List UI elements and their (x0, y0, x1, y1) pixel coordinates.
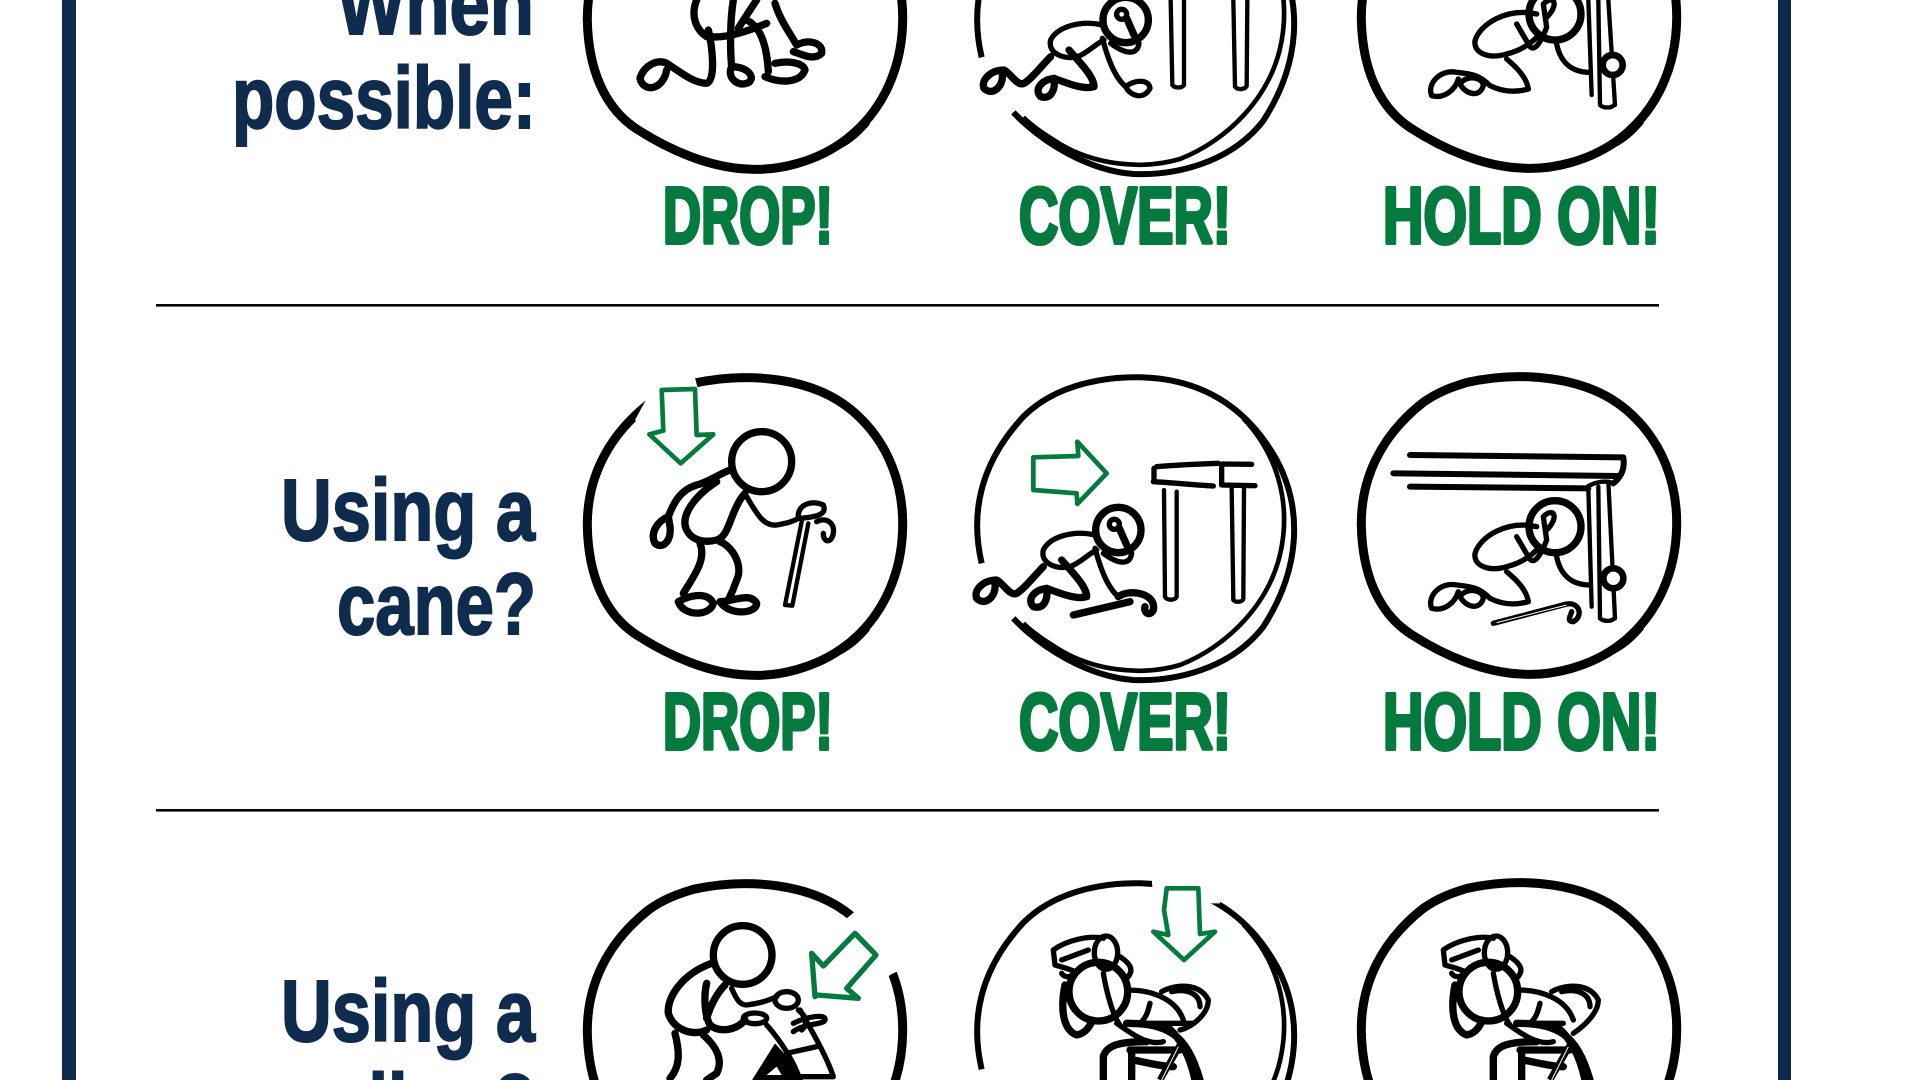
panel: cover with walker (977, 877, 1294, 1080)
panel: cover (977, 0, 1294, 260)
label: drop: DROP! (663, 677, 833, 766)
label: cover: COVER! (1019, 677, 1231, 766)
illustration: person in walker seat holding on (1361, 883, 1677, 1080)
illustration: person holding table leg (1361, 0, 1677, 168)
heading: using a cane: Using a (281, 462, 535, 559)
illustration: person with cane dropping (587, 372, 903, 675)
heading: using a walker: Using a (281, 963, 535, 1060)
label: cover: COVER! (1019, 171, 1231, 260)
row: using a cane (281, 372, 1677, 766)
left border bar (62, 0, 76, 1080)
heading: when possible (232, 0, 536, 147)
illustration: person in walker seat covering (977, 877, 1294, 1080)
label: hold on: HOLD ON! (1383, 171, 1660, 260)
label: drop: DROP! (663, 171, 833, 260)
heading: using a cane: cane? (337, 556, 536, 653)
illustration: person with cane crawling to table (976, 377, 1294, 680)
heading: when possible: possible: (232, 50, 536, 147)
illustration: person crawling to table (977, 0, 1294, 174)
icon: down arrow (649, 389, 713, 463)
icon: down arrow (1153, 888, 1215, 960)
panel: hold on with walker (1361, 883, 1677, 1080)
right border bar (1778, 0, 1791, 1080)
panel: drop (587, 0, 903, 260)
illustration: person with walker dropping (587, 884, 907, 1080)
panel: hold on (1361, 0, 1677, 260)
panel: hold on with cane (1361, 377, 1677, 766)
icon: right arrow (1033, 442, 1107, 504)
icon: diagonal arrow (812, 933, 876, 998)
heading: using a cane (281, 462, 536, 653)
illustration: person dropping (587, 0, 903, 169)
row: when possible (232, 0, 1677, 260)
panel: cover with cane (976, 377, 1294, 766)
heading: using a walker (284, 976, 536, 1080)
label: hold on: HOLD ON! (1383, 677, 1660, 766)
panel: drop with cane (587, 372, 903, 766)
row: using a walker (274, 877, 1677, 1080)
illustration: person with cane holding table leg (1361, 377, 1677, 674)
panel: drop with walker (587, 884, 907, 1080)
